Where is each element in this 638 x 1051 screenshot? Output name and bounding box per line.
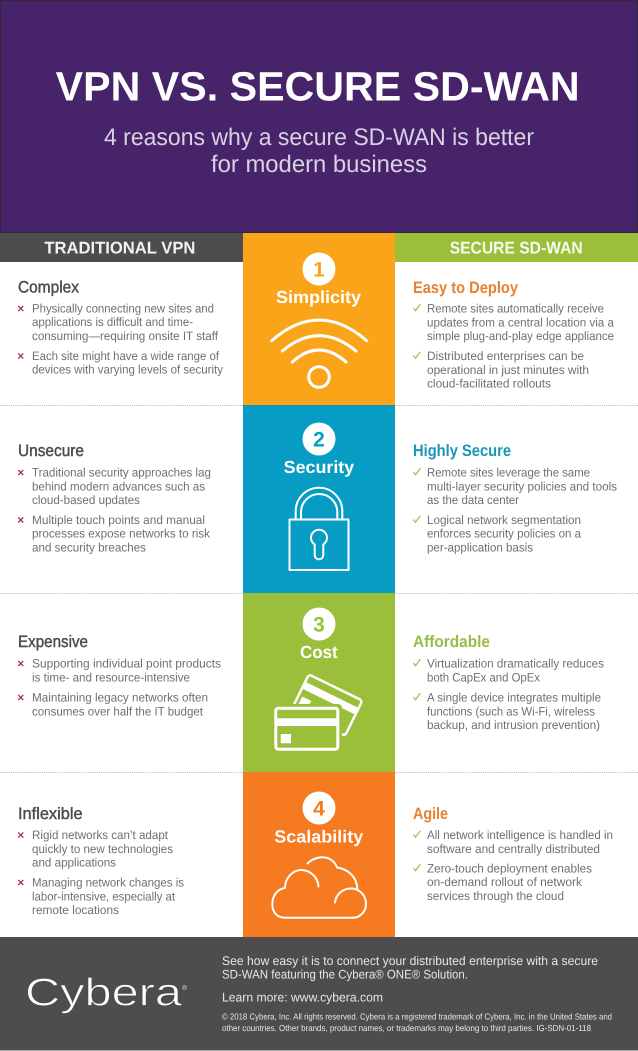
text block: unsecure: behind modern advances such as xyxy=(32,479,205,493)
text block: complex: Physically connecting new sites and xyxy=(32,301,214,315)
column header: secure SD-WAN: SECURE SD-WAN xyxy=(450,238,583,258)
text block: expensive: is time- and resource-intensive xyxy=(32,671,190,685)
text block: easy to deploy xyxy=(413,279,614,390)
icon: credit cards xyxy=(272,674,363,754)
column header: traditional VPN xyxy=(0,233,243,262)
text block: agile: services through the cloud xyxy=(427,889,564,903)
text block: highly secure: per-application basis xyxy=(427,540,533,554)
panel: title banner xyxy=(0,0,638,233)
text block: complex: × xyxy=(17,349,24,363)
text block: expensive: Supporting individual point products xyxy=(32,657,221,671)
text block: expensive xyxy=(17,633,221,718)
text block: complex: consuming—requiring onsite IT staff xyxy=(32,329,219,343)
text block: complex: devices with varying levels of security xyxy=(32,363,224,377)
text block: unsecure: × xyxy=(17,466,24,480)
icon: cloud xyxy=(272,857,366,918)
number badge 3 xyxy=(302,608,336,640)
text block: easy to deploy: Distributed enterprises can be xyxy=(427,349,584,363)
text block: affordable xyxy=(413,633,604,732)
text block: unsecure: cloud-based updates xyxy=(32,493,140,507)
text block: agile: Agile xyxy=(413,805,448,823)
number badge 4 xyxy=(302,792,336,824)
legal text: other countries. Other brands, product names, or trademarks may belong to third parties. IG-SDN-01-118 xyxy=(222,1023,591,1033)
panel: security xyxy=(243,405,395,593)
text block: unsecure: Traditional security approaches lag xyxy=(32,466,211,480)
text block: easy to deploy: simple plug-and-play edge appliance xyxy=(427,329,614,343)
text block: affordable: functions (such as Wi-Fi, wireless xyxy=(427,704,595,718)
text block: easy to deploy: cloud-facilitated rollouts xyxy=(427,376,551,390)
text block: highly secure xyxy=(413,442,617,554)
text block: inflexible: × xyxy=(17,876,24,890)
text block: inflexible: Managing network changes is xyxy=(32,876,184,890)
label: security: Security xyxy=(284,457,354,477)
text block: agile: All network intelligence is handled in xyxy=(427,828,613,842)
text block: agile xyxy=(413,805,613,903)
column header: secure SD-WAN xyxy=(395,233,638,262)
text block: unsecure xyxy=(17,442,211,554)
text block: unsecure: Multiple touch points and manual xyxy=(32,513,205,527)
text block: expensive: × xyxy=(17,691,24,705)
panel: simplicity xyxy=(243,233,395,405)
text block: inflexible: Inflexible xyxy=(18,805,83,823)
text block: complex: Complex xyxy=(18,278,80,296)
number badge 2 xyxy=(302,422,336,456)
subtitle: 4 reasons why a secure SD-WAN is better xyxy=(104,124,534,151)
number badge 1 xyxy=(302,252,336,286)
text block: unsecure: Unsecure xyxy=(18,442,84,460)
call to action: SD-WAN featuring the Cybera® ONE® Solution. xyxy=(222,968,468,982)
label: scalability: Scalability xyxy=(274,826,364,846)
subtitle: for modern business xyxy=(211,151,427,178)
panel: cost xyxy=(243,593,395,772)
icon: padlock xyxy=(290,488,348,570)
text block: inflexible: and applications xyxy=(32,856,116,870)
text block: easy to deploy: Easy to Deploy xyxy=(413,279,519,297)
text block: expensive: consumes over half the IT budget xyxy=(32,704,204,718)
text block: complex: Each site might have a wide range of xyxy=(32,349,220,363)
text block: highly secure: Logical network segmentation xyxy=(427,513,581,527)
text block: complex xyxy=(17,278,224,377)
text block: unsecure: and security breaches xyxy=(32,540,146,554)
subtitle xyxy=(104,124,534,178)
call to action xyxy=(222,954,598,1005)
text block: affordable: Affordable xyxy=(413,633,490,651)
text block: inflexible xyxy=(17,805,184,917)
title: VPN VS. SECURE SD-WAN xyxy=(56,64,580,110)
call to action: See how easy it is to connect your distributed enterprise with a secure xyxy=(222,954,598,968)
text block: unsecure: × xyxy=(17,513,24,527)
text block: inflexible: quickly to new technologies xyxy=(32,842,173,856)
text block: expensive: × xyxy=(17,657,24,671)
text block: inflexible: Rigid networks can’t adapt xyxy=(32,828,169,842)
icon: wifi xyxy=(272,320,367,387)
text block: agile: Zero-touch deployment enables xyxy=(427,861,592,875)
text block: inflexible: remote locations xyxy=(32,903,119,917)
column header: traditional VPN: TRADITIONAL VPN xyxy=(44,238,195,258)
logo: Cybera: ® xyxy=(182,985,188,992)
text block: complex: × xyxy=(17,301,24,315)
number badge 3: 3 xyxy=(313,614,325,636)
text block: highly secure: Highly Secure xyxy=(413,442,511,460)
text block: affordable: both CapEx and OpEx xyxy=(427,671,540,685)
text block: affordable: Virtualization dramatically reduces xyxy=(427,657,604,671)
label: cost: Cost xyxy=(300,642,338,662)
text block: highly secure: enforces security policies on a xyxy=(427,526,581,540)
text block: highly secure: as the data center xyxy=(427,493,519,507)
panel: scalability xyxy=(243,772,395,937)
number badge 1: 1 xyxy=(313,258,325,282)
text block: unsecure: processes expose networks to risk xyxy=(32,526,211,540)
text block: inflexible: labor-intensive, especially at xyxy=(32,889,176,903)
text block: easy to deploy: updates from a central location via a xyxy=(427,316,614,330)
text block: affordable: A single device integrates multiple xyxy=(427,691,601,705)
text block: inflexible: × xyxy=(17,828,24,842)
number badge 2: 2 xyxy=(313,428,325,452)
text block: complex: applications is difficult and time- xyxy=(32,315,193,329)
number badge 4: 4 xyxy=(313,798,325,820)
legal text xyxy=(222,1012,612,1033)
text block: agile: on-demand rollout of network xyxy=(427,875,583,889)
text block: expensive: Maintaining legacy networks often xyxy=(32,691,208,705)
text block: highly secure: Remote sites leverage the same xyxy=(427,466,590,480)
text block: affordable: backup, and intrusion prevention) xyxy=(427,718,600,732)
panel: footer xyxy=(0,937,638,1050)
text block: expensive: Expensive xyxy=(18,633,88,651)
text block: highly secure: multi-layer security policies and tools xyxy=(427,479,617,493)
logo: Cybera: Cybera xyxy=(25,972,182,1014)
text block: easy to deploy: Remote sites automatically receive xyxy=(427,302,604,316)
label: simplicity: Simplicity xyxy=(276,287,361,307)
text block: agile: software and centrally distributed xyxy=(427,842,600,856)
call to action: Learn more: www.cybera.com xyxy=(222,991,383,1005)
text block: easy to deploy: operational in just minutes with xyxy=(427,363,589,377)
